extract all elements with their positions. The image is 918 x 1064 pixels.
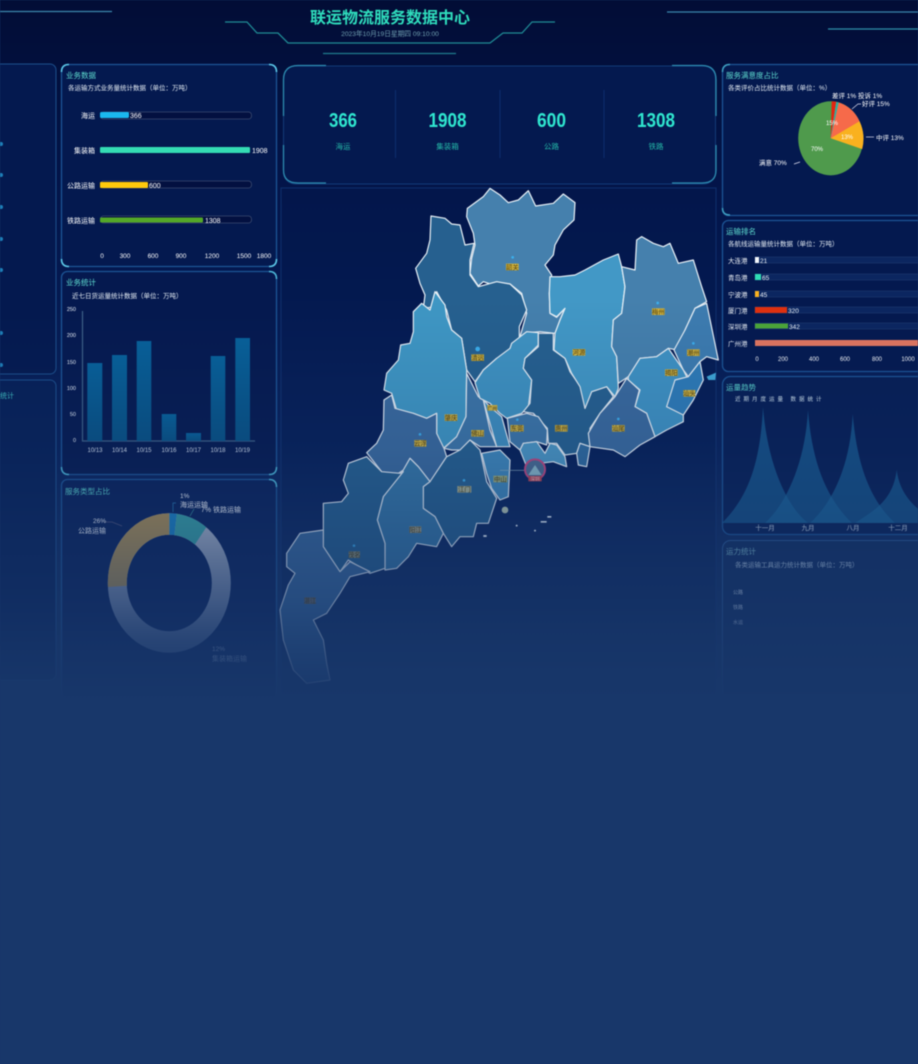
map label group: 肇庆 <box>445 413 458 422</box>
map label group: 湛江 <box>304 597 317 605</box>
row labels: 45 <box>760 292 768 299</box>
x axis labels: 10/14 <box>112 448 128 454</box>
x axis labels <box>87 448 251 454</box>
region: delta east <box>507 413 547 450</box>
y axis labels: 0 <box>73 438 76 444</box>
map: highlighted location marker: 深圳 <box>530 475 540 482</box>
panel: lower right <box>722 540 918 710</box>
stat: 366: 366 <box>329 110 357 132</box>
pie <box>798 101 863 175</box>
map label group: 潮州 <box>687 348 700 357</box>
panel: left edge upper <box>0 64 56 374</box>
month labels: 十二月 <box>888 523 908 532</box>
row labels: 65 <box>762 275 770 282</box>
row labels: 大连港 <box>728 256 748 265</box>
region: central <box>444 373 497 450</box>
stat: 600 <box>537 110 566 151</box>
row: 铁路: 铁路运输 <box>67 216 95 225</box>
pie labels: 满意 70% <box>759 158 787 167</box>
stat: 600: 公路 <box>544 141 559 151</box>
month labels: 十一月 <box>755 523 775 532</box>
map label group: 江门 <box>458 485 471 494</box>
map: regions <box>280 188 718 683</box>
region: northeast light <box>549 254 625 408</box>
region: southeast coast <box>588 378 655 457</box>
panel: transport progress bars <box>62 64 276 266</box>
panel: center stats <box>284 66 716 184</box>
region: central strip <box>483 400 510 447</box>
region: west middle <box>367 395 447 482</box>
donut labels: 7% 铁路运输 <box>201 505 241 514</box>
month labels: 九月 <box>802 523 814 532</box>
donut labels: 26% <box>93 518 106 525</box>
date subtitle: 2023年10月19日星期四 09:10:00 <box>341 29 439 38</box>
panel: peak area chart <box>722 376 918 534</box>
map label group: 河源 <box>573 348 586 357</box>
map label group: 广州 <box>488 405 497 412</box>
x axis: 0 <box>100 253 104 260</box>
month labels <box>755 523 908 532</box>
panel: pie chart <box>722 64 918 216</box>
row: 公路: 公路运输 <box>67 181 95 190</box>
donut labels: 公路运输 <box>78 526 106 535</box>
subheading: 各航线运输量统计数据（单位：万吨） <box>728 239 838 248</box>
stat: 1908: 1908 <box>428 110 466 132</box>
row: 铁路: 1308 <box>205 218 221 225</box>
row labels <box>728 256 800 348</box>
map label group: 揭阳 <box>665 368 678 377</box>
region: peninsula <box>280 530 370 683</box>
map label group: 东莞 <box>511 424 524 433</box>
panel: bar chart <box>62 272 276 474</box>
row: 公路: 600 <box>149 183 161 190</box>
y axis labels: 100 <box>67 386 76 392</box>
pie labels: 差评 1% 投诉 1% <box>832 91 882 100</box>
row labels: 厦门港 <box>728 306 748 315</box>
subheading: 各运输方式业务量统计数据（单位：万吨） <box>68 83 192 92</box>
region: east coast <box>667 362 703 415</box>
subheading: 各类评价占比统计数据（单位：%） <box>728 83 831 92</box>
map label group: 惠州 <box>555 424 568 433</box>
row: 铁路 <box>67 216 252 225</box>
donut labels: 集装箱运输 <box>212 654 247 663</box>
heading: 服务满意度占比 <box>726 70 779 80</box>
region: northwest dark <box>416 216 527 382</box>
map: highlighted location marker <box>500 459 545 482</box>
title: 联运物流服务数据中心 <box>310 8 470 27</box>
pie labels: 70% <box>811 147 824 153</box>
region: delta south <box>520 442 567 467</box>
heading: 运输排名 <box>726 226 756 236</box>
bottom fade overlay <box>0 300 918 700</box>
row labels: 342 <box>789 324 800 331</box>
x axis: 600 <box>148 253 159 260</box>
row labels <box>733 589 743 626</box>
header <box>0 8 918 54</box>
x axis: 400 <box>809 357 820 363</box>
donut labels: 海运运输 <box>180 500 208 509</box>
map: city labels <box>304 256 700 605</box>
y axis labels: 250 <box>67 307 76 313</box>
pie labels: 13% <box>841 135 854 141</box>
x axis labels: 10/13 <box>87 448 103 454</box>
row labels: 水运 <box>733 619 743 626</box>
stat: 366: 海运 <box>336 141 351 151</box>
map label group: 茂名 <box>348 550 361 559</box>
row: 海运 <box>81 111 252 120</box>
region: west light <box>384 292 467 448</box>
map label group: 汕尾 <box>612 424 625 433</box>
map label group: 阳江 <box>409 525 422 534</box>
map label group: 清远 <box>471 353 485 362</box>
row labels: 宁波港 <box>728 290 748 299</box>
row labels: 铁路 <box>733 604 743 611</box>
stat: 1908: 集装箱 <box>436 141 459 151</box>
region: east central dark <box>523 333 613 455</box>
axes <box>82 311 255 441</box>
subheading: 各类运输工具运力统计数据（单位：万吨） <box>735 560 858 569</box>
heading: 运量趋势 <box>726 382 756 392</box>
row labels: 广州港 <box>728 339 748 348</box>
pie labels: 中评 13% <box>876 133 904 142</box>
map label group: 汕头 <box>683 389 696 398</box>
stat: 1308: 1308 <box>637 110 675 132</box>
subheading: 近期月度运量 数据统计 <box>735 395 825 403</box>
donut <box>117 524 221 642</box>
row: 海运: 海运 <box>81 111 95 120</box>
panel: map frame <box>281 188 716 708</box>
heading: 服务类型占比 <box>65 486 110 496</box>
x axis <box>100 253 272 260</box>
heading: 业务统计 <box>66 277 96 287</box>
region: delta peninsula <box>482 450 510 500</box>
row: 集装箱 <box>74 146 268 155</box>
map label group: 云浮 <box>414 439 427 448</box>
region: southwest dark <box>423 440 497 547</box>
stat: 1908 <box>428 110 466 151</box>
heading: 业务数据 <box>66 70 96 80</box>
x axis: 1500 <box>237 253 252 260</box>
region: southwest <box>323 457 403 573</box>
row labels: 青岛港 <box>728 273 748 282</box>
panel: left edge lower <box>0 380 56 680</box>
y axis labels: 200 <box>67 333 76 339</box>
x axis: 0 <box>755 357 759 363</box>
x axis: 800 <box>872 357 883 363</box>
x axis labels: 10/16 <box>161 448 177 454</box>
pie labels <box>759 91 904 167</box>
region: east light <box>628 348 688 437</box>
x axis: 1000 <box>901 357 915 363</box>
stat: 366 <box>329 110 357 151</box>
x axis labels: 10/18 <box>210 448 226 454</box>
y axis labels <box>67 307 76 444</box>
map label group <box>304 256 700 605</box>
x axis: 200 <box>778 357 789 363</box>
stat: 1308: 铁路 <box>648 141 664 151</box>
donut labels: 1% <box>180 493 190 500</box>
panel: left edge lower: 统计 <box>0 391 14 400</box>
region: south coast <box>377 458 443 570</box>
map label group: 中山 <box>494 474 507 483</box>
month labels: 八月 <box>846 524 860 532</box>
x axis: 600 <box>840 357 851 363</box>
stat: 600: 600 <box>537 110 566 132</box>
x axis: 300 <box>120 253 131 260</box>
peaks <box>722 407 918 523</box>
donut labels <box>78 493 247 663</box>
y axis labels: 50 <box>70 412 76 418</box>
y axis labels: 150 <box>67 360 76 366</box>
map label group: 佛山 <box>471 429 484 438</box>
row: 公路 <box>67 181 252 190</box>
map label group: 梅州 <box>652 307 665 316</box>
heading: 运力统计 <box>726 546 756 556</box>
row labels: 21 <box>760 258 768 265</box>
x axis <box>755 357 915 363</box>
map label group: 韶关 <box>506 262 519 271</box>
bars <box>755 257 918 346</box>
pie labels: 15% <box>826 121 839 127</box>
islands <box>483 373 716 537</box>
x axis labels: 10/17 <box>186 448 202 454</box>
row: 集装箱: 1908 <box>252 148 268 155</box>
panel: right progress bars <box>722 220 918 372</box>
region: north <box>467 188 575 337</box>
row labels: 深圳港 <box>728 322 748 331</box>
header decorative lines <box>0 12 918 54</box>
x axis labels: 10/15 <box>136 448 152 454</box>
stat: 1308 <box>637 110 675 151</box>
row: 集装箱: 集装箱 <box>74 146 95 155</box>
row: 海运: 366 <box>130 113 142 120</box>
x axis: 900 <box>176 253 187 260</box>
subheading: 近七日货运量统计数据（单位：万吨） <box>72 291 182 300</box>
x axis: 1200 <box>205 253 220 260</box>
region: northeast <box>612 237 707 383</box>
tracks <box>755 257 918 329</box>
pie labels: 好评 15% <box>862 99 890 108</box>
panel: donut chart <box>62 480 276 720</box>
x axis: 1800 <box>257 253 272 260</box>
region: far east <box>674 303 718 377</box>
row labels: 公路 <box>733 589 743 596</box>
row labels: 320 <box>788 308 799 315</box>
donut labels: 12% <box>212 646 225 653</box>
x axis labels: 10/19 <box>235 448 251 454</box>
bars <box>87 338 250 441</box>
region: small coast <box>577 443 590 467</box>
region: central light <box>475 332 538 418</box>
